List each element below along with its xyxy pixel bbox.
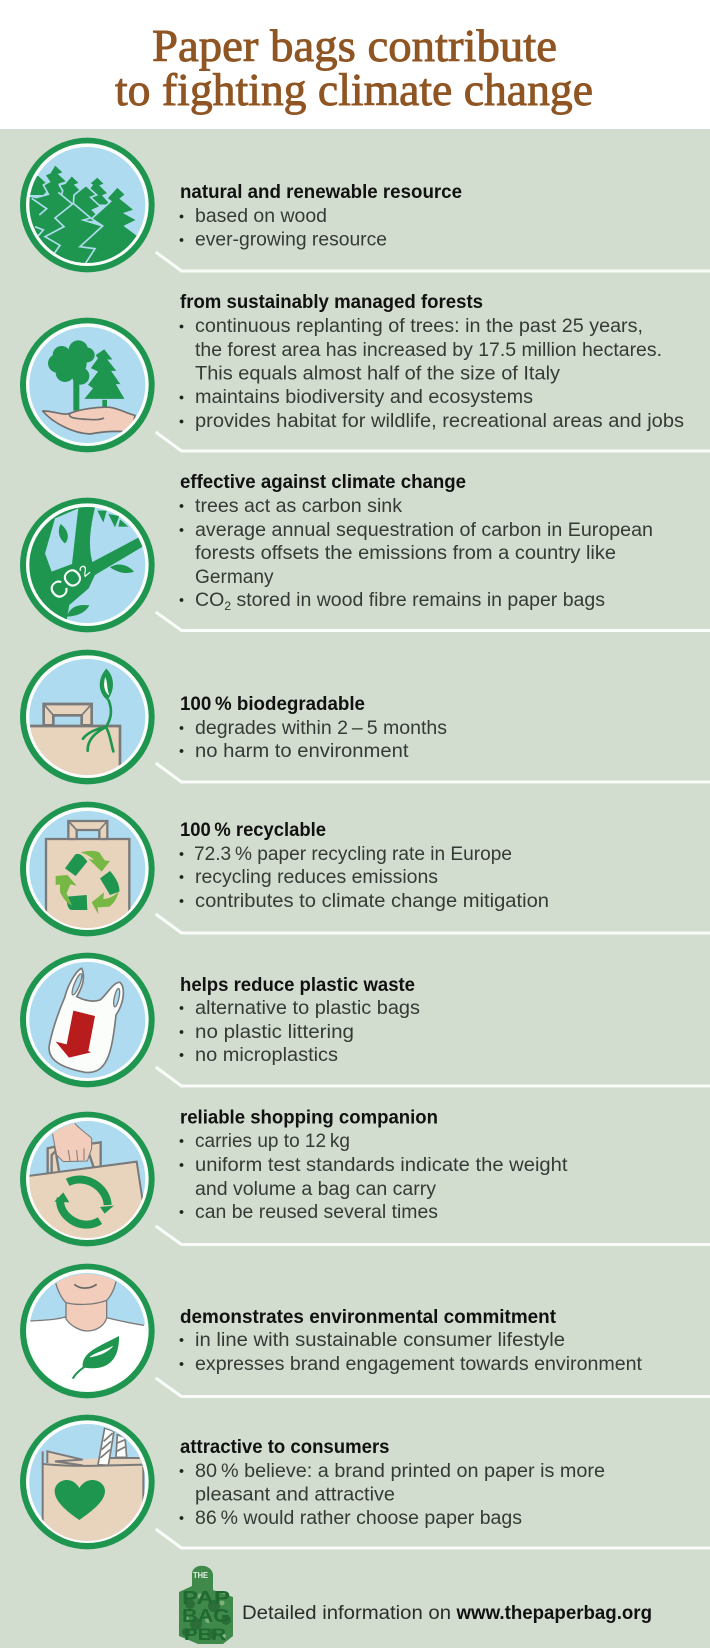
text block: helps reduce plastic waste: helps reduce plastic waste xyxy=(180,975,415,996)
text block: effective against climate change: effective against climate change xyxy=(180,472,466,493)
connector line 7 xyxy=(156,1226,710,1244)
icon: person with leaf on shirt xyxy=(20,1264,155,1400)
icon: bag with sprouting plant xyxy=(20,650,155,784)
text block: reliable shopping companion: can be reused several times xyxy=(195,1202,438,1223)
text block: from sustainably managed forests: provides habitat for wildlife, recreational areas and jobs xyxy=(195,411,684,432)
text block: 100 % biodegradable xyxy=(180,694,447,762)
text block: demonstrates environmental commitment: demonstrates environmental commitment xyxy=(180,1307,557,1328)
text block: from sustainably managed forests: maintains biodiversity and ecosystems xyxy=(195,387,533,408)
text block: 100 % recyclable: recycling reduces emissions xyxy=(195,867,438,888)
footer text xyxy=(242,1603,652,1624)
text block: effective against climate change: forests offsets the emissions from a country like xyxy=(195,543,616,564)
text block: helps reduce plastic waste xyxy=(180,975,420,1066)
text block: 100 % recyclable xyxy=(180,820,549,912)
text block: attractive to consumers: pleasant and attractive xyxy=(195,1484,395,1506)
text block: reliable shopping companion xyxy=(180,1108,568,1223)
connector line 8 xyxy=(156,1378,710,1396)
icon: bag with green heart xyxy=(20,1415,155,1551)
connector line 2 xyxy=(156,432,710,451)
text block: from sustainably managed forests: continuous replanting of trees: in the past 25 years, xyxy=(195,316,643,337)
text block: natural and renewable resource: ever-growing resource xyxy=(195,230,387,250)
text block: helps reduce plastic waste: no plastic littering xyxy=(195,1022,354,1043)
title xyxy=(115,20,593,115)
logo: The Paper Bag: BAG xyxy=(182,1606,230,1626)
text block: effective against climate change: trees act as carbon sink xyxy=(195,496,403,517)
text block: from sustainably managed forests: This equals almost half of the size of Italy xyxy=(195,364,561,384)
text block: demonstrates environmental commitment: expresses brand engagement towards environment xyxy=(195,1354,643,1375)
text block: attractive to consumers: 86 % would rather choose paper bags xyxy=(195,1508,522,1529)
text block: 100 % biodegradable: degrades within 2 – 5 months xyxy=(195,718,447,739)
connector line 6 xyxy=(156,1067,710,1086)
text block: natural and renewable resource xyxy=(180,182,462,250)
connector line 4 xyxy=(156,763,710,782)
icon: tree branch with CO2: CO xyxy=(44,562,89,606)
text block: effective against climate change: CO xyxy=(195,590,224,611)
icon: tree branch with CO2: 2 xyxy=(76,562,94,581)
text block: natural and renewable resource: natural and renewable resource xyxy=(180,182,462,203)
icon: trees on hand xyxy=(20,318,155,452)
icon: tree branch with CO2 xyxy=(20,498,155,632)
text block: attractive to consumers: attractive to consumers xyxy=(180,1437,390,1458)
text block: 100 % recyclable: 100 % recyclable xyxy=(180,820,326,841)
logo: The Paper Bag xyxy=(179,1566,233,1644)
icon: bag with recycling symbol xyxy=(20,802,155,936)
text block: reliable shopping companion: and volume a bag can carry xyxy=(195,1179,437,1200)
text block: natural and renewable resource: based on wood xyxy=(195,206,327,227)
text block: reliable shopping companion: carries up to 12 kg xyxy=(195,1131,350,1152)
text block: reliable shopping companion: uniform test standards indicate the weight xyxy=(195,1155,568,1176)
icon: plastic bag with red arrow xyxy=(20,953,155,1087)
logo: The Paper Bag: PAP xyxy=(182,1588,230,1608)
text block: from sustainably managed forests xyxy=(180,292,684,432)
connector line 5 xyxy=(156,914,710,933)
text block: 100 % recyclable: contributes to climate change mitigation xyxy=(195,891,549,912)
icon: hand carrying bag xyxy=(20,1112,155,1248)
footer text: Detailed information on xyxy=(242,1603,451,1624)
logo: The Paper Bag: PER xyxy=(184,1625,226,1644)
connector line 1 xyxy=(156,252,710,271)
text block: 100 % recyclable: 72.3 % paper recycling rate in Europe xyxy=(194,844,512,865)
text block: attractive to consumers: 80 % believe: a brand printed on paper is more xyxy=(195,1461,605,1482)
text block: effective against climate change: Germany xyxy=(195,567,274,588)
connector line 3 xyxy=(156,612,710,630)
footer text: www.thepaperbag.org xyxy=(456,1603,652,1624)
title: to fighting climate change xyxy=(115,64,593,115)
logo: The Paper Bag: THE xyxy=(193,1571,209,1580)
text block: 100 % biodegradable: no harm to environment xyxy=(195,741,409,762)
text block: from sustainably managed forests: from sustainably managed forests xyxy=(180,292,483,313)
text block: effective against climate change: 2 xyxy=(224,599,231,613)
text block: demonstrates environmental commitment xyxy=(180,1307,643,1375)
text block: reliable shopping companion: reliable shopping companion xyxy=(180,1108,438,1128)
text block: effective against climate change: stored in wood fibre remains in paper bags xyxy=(231,590,605,611)
text block: 100 % biodegradable: 100 % biodegradable xyxy=(180,694,365,715)
text block: helps reduce plastic waste: alternative to plastic bags xyxy=(195,998,420,1019)
text block: effective against climate change: average annual sequestration of carbon in European xyxy=(195,520,653,541)
text block: from sustainably managed forests: the forest area has increased by 17.5 million hectares. xyxy=(195,340,662,361)
text block: attractive to consumers xyxy=(180,1437,605,1529)
text block: helps reduce plastic waste: no microplastics xyxy=(195,1045,338,1066)
icon: forest xyxy=(20,138,155,272)
connector line 9 xyxy=(156,1529,710,1548)
text block: demonstrates environmental commitment: in line with sustainable consumer lifestyle xyxy=(195,1330,565,1351)
text block: effective against climate change xyxy=(180,472,653,613)
title: Paper bags contribute xyxy=(152,20,557,71)
